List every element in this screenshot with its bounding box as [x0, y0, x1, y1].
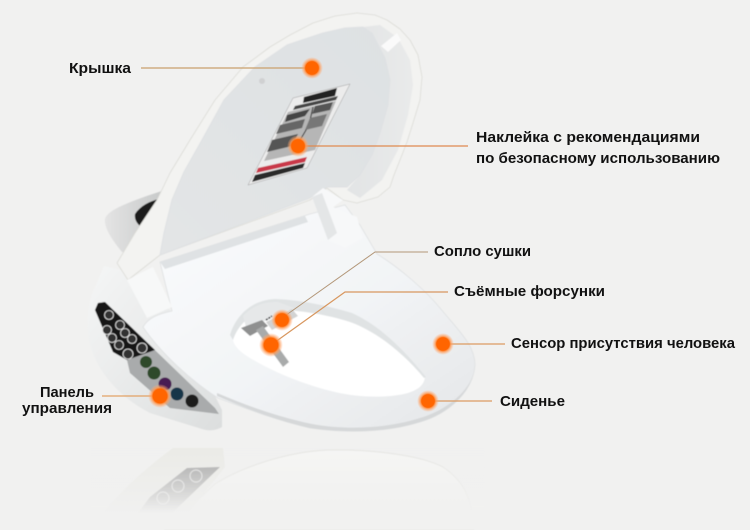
lid [117, 13, 422, 280]
seat [143, 205, 475, 431]
leader line: sticker [298, 145, 468, 147]
marker: lid [301, 57, 323, 79]
label: drying nozzle: Сопло сушки [434, 243, 531, 260]
leader line: presence sensor [443, 343, 505, 345]
label: seat: Сиденье [500, 393, 565, 410]
label: removable nozzles: Съёмные форсунки [454, 283, 605, 300]
lid inner crescent [347, 25, 413, 198]
marker: seat [417, 390, 439, 412]
label: sticker [476, 129, 720, 167]
marker: removable nozzles [259, 333, 283, 357]
reflection: seat and control panel [90, 445, 485, 530]
label: sticker: по безопасному использованию [476, 150, 720, 167]
device back box [105, 190, 165, 255]
label: control panel [22, 384, 112, 417]
leader line: control panel [102, 395, 160, 397]
marker: drying nozzle [271, 309, 293, 331]
label: control panel: Панель [40, 384, 94, 401]
control panel [95, 302, 219, 414]
leader line: lid [141, 67, 312, 69]
seat opening [233, 306, 425, 397]
marker: control panel [148, 384, 172, 408]
device illustration [88, 13, 475, 431]
label: sticker: Наклейка с рекомендациями [476, 129, 700, 146]
label: control panel: управления [22, 400, 112, 417]
marker: presence sensor [432, 333, 454, 355]
seat opening ridge [230, 299, 426, 378]
leader line: seat [428, 400, 492, 402]
leader line: removable nozzles [271, 292, 448, 345]
label: lid: Крышка [69, 60, 132, 77]
marker: sticker [287, 135, 309, 157]
hinge right [312, 188, 363, 248]
hinge left [127, 267, 172, 318]
leader line: drying nozzle [282, 252, 428, 318]
sticker with safety recommendations [248, 84, 350, 185]
lid inner surface [160, 27, 390, 255]
label: presence sensor: Сенсор присутствия человека [511, 335, 736, 352]
nozzle assembly [241, 320, 268, 336]
panel body base [88, 266, 222, 430]
